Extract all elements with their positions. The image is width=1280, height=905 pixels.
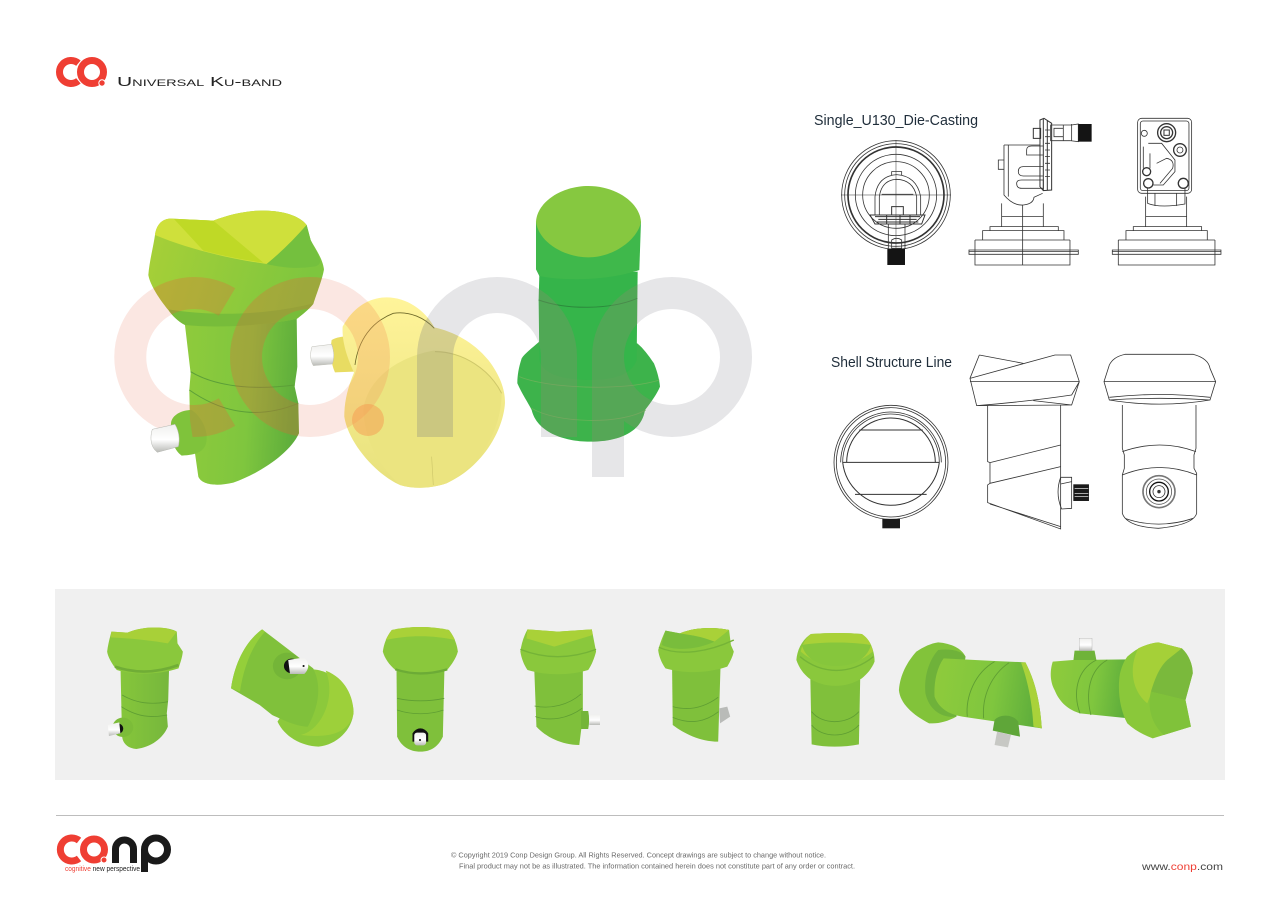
front circular view — [841, 140, 951, 265]
view 5 — [658, 628, 734, 742]
website: www. conp .com — [1141, 861, 1223, 873]
line drawings: shell structure views — [834, 355, 1089, 529]
copyright notice: Final product may not be as illustrated. The information contained herein does not constitute part of any order or contract. — [459, 864, 855, 870]
front outline — [834, 405, 948, 528]
line drawing: rear shell view — [1104, 354, 1216, 528]
product render: angled green LNB — [148, 210, 324, 485]
view 7 — [899, 642, 1042, 747]
copyright notice: © Copyright 2019 Conp Design Group. All Rights Reserved. Concept drawings are subject to change without notice. — [451, 852, 826, 860]
line drawings: die-casting views — [841, 118, 1221, 265]
title: Universal Ku-band — [117, 74, 283, 89]
product render: upright dark-green LNB — [517, 186, 660, 442]
view 6 — [796, 633, 875, 747]
panel: view strip — [55, 589, 1225, 780]
side outline — [970, 355, 1089, 529]
strip views 5 to 8 — [658, 628, 1193, 747]
strip views 1 to 4 — [107, 627, 600, 752]
view 3 — [383, 627, 458, 752]
view 8 — [1051, 638, 1193, 738]
header logo — [59, 60, 105, 86]
view 4 — [520, 629, 600, 745]
rear section view — [1112, 118, 1221, 265]
footer logo — [60, 838, 168, 873]
heading: shell structure: Shell Structure Line — [831, 355, 952, 371]
view 1 — [107, 628, 183, 749]
logo tagline: cognitive new perspective — [65, 866, 140, 873]
heading: die-casting: Single_U130_Die-Casting — [814, 113, 978, 129]
copyright notice — [451, 852, 855, 870]
view 2 — [231, 629, 354, 747]
watermark — [130, 293, 736, 477]
product render: translucent yellow LNB — [310, 297, 505, 488]
side section view — [969, 118, 1092, 265]
